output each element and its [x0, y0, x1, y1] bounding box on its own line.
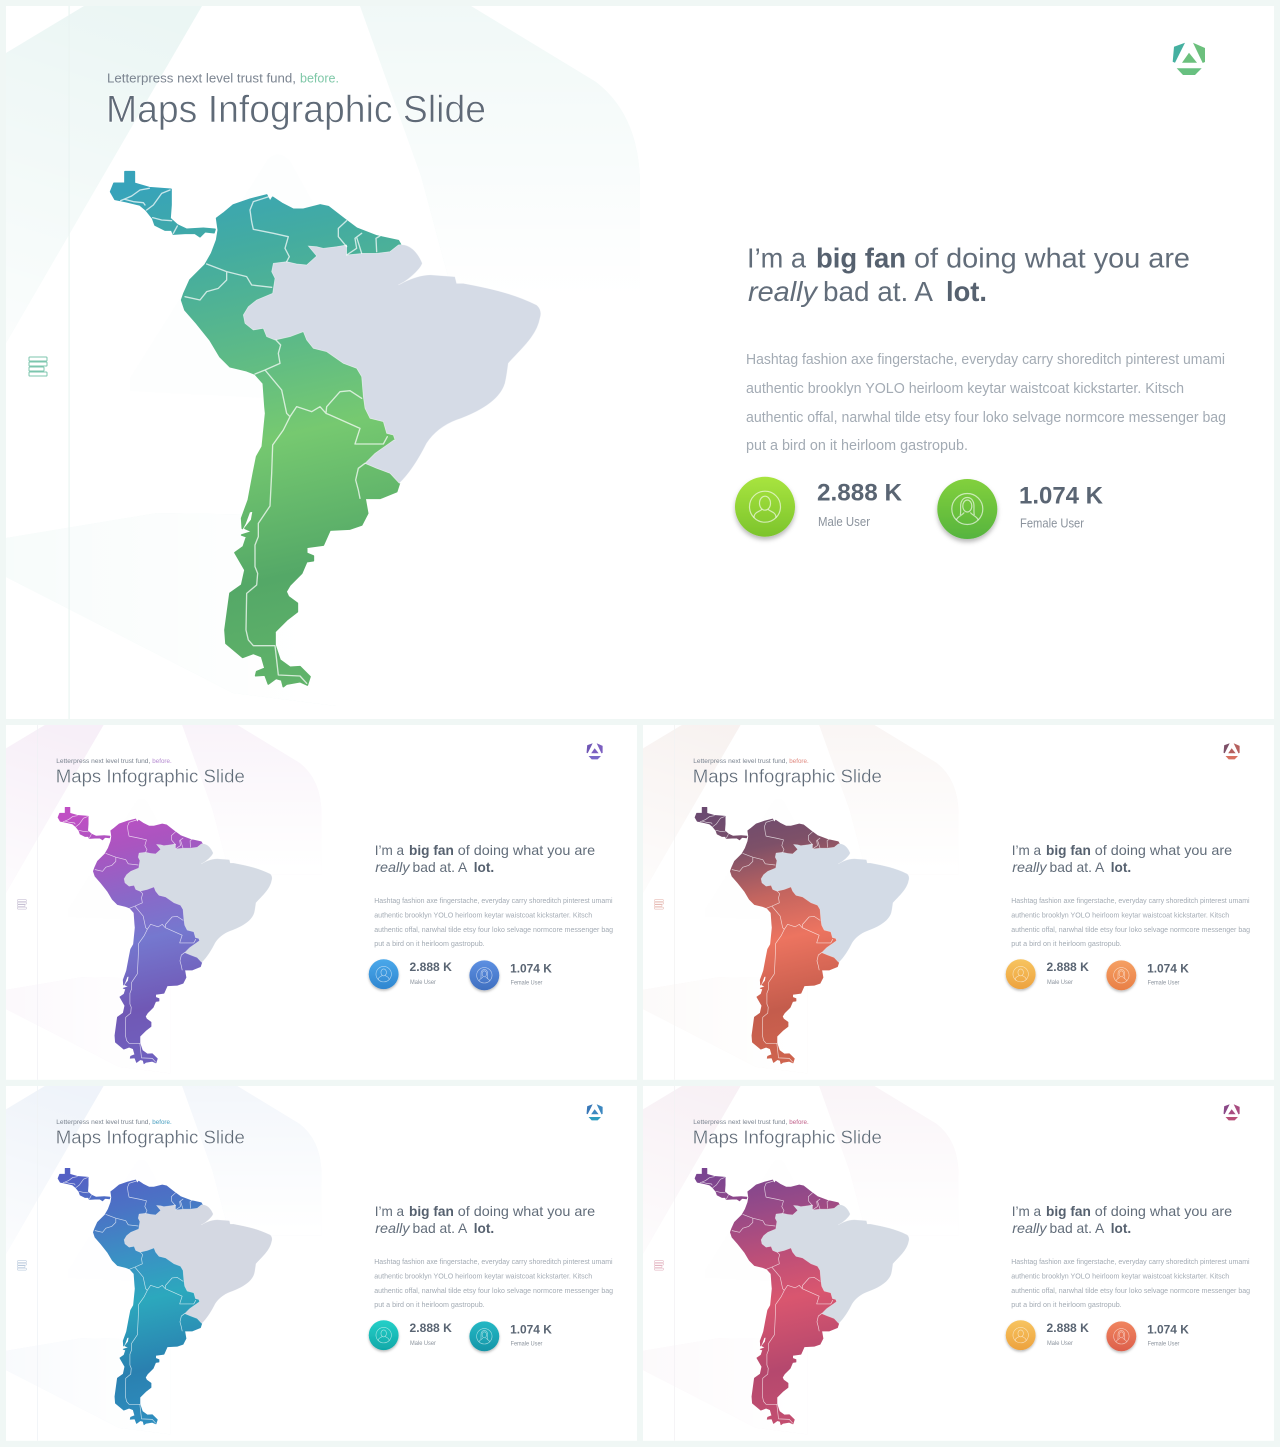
stat: male users: 2.888 K: [410, 1321, 452, 1335]
stat: female users: Female User: [1020, 517, 1084, 531]
subtitle: before.: [789, 758, 809, 765]
stat: female users: 1.074 K: [510, 961, 552, 975]
body text: put a bird on it heirloom gastropub.: [1011, 939, 1122, 948]
heading: [1012, 1203, 1232, 1236]
heading: [1012, 842, 1232, 875]
heading: bad at. A: [413, 1220, 468, 1236]
stat: female users: 1.074 K: [1147, 1322, 1189, 1336]
body text: [374, 1257, 613, 1309]
stat: male users: [369, 1320, 452, 1350]
slide background shapes: [643, 725, 1274, 1080]
stat: female users: 1.074 K: [1019, 482, 1104, 509]
subtitle: before.: [789, 1119, 809, 1126]
heading: lot.: [474, 859, 494, 875]
map: South America: [695, 807, 909, 1064]
slide background shapes: [6, 1086, 637, 1441]
stat: male users: Male User: [410, 1340, 436, 1347]
heading: big fan: [1046, 1203, 1091, 1219]
subtitle: Letterpress next level trust fund,: [107, 70, 296, 86]
map: South America: [111, 172, 541, 687]
heading: big fan: [1046, 842, 1091, 858]
stat: male users: 2.888 K: [1047, 960, 1089, 974]
subtitle: Letterpress next level trust fund,: [56, 758, 151, 765]
heading: bad at. A: [1050, 859, 1105, 875]
body text: authentic offal, narwhal tilde etsy four loko selvage normcore messenger bag: [1011, 1286, 1250, 1295]
heading: I’m a: [1012, 1203, 1041, 1219]
stat: male users: 2.888 K: [410, 960, 452, 974]
title: Maps Infographic Slide: [106, 89, 486, 131]
body text: authentic brooklyn YOLO heirloom keytar waistcoat kickstarter. Kitsch: [1011, 911, 1229, 920]
stat: male users: Male User: [1047, 1340, 1073, 1347]
icon: menu lines: [654, 900, 663, 909]
body text: Hashtag fashion axe fingerstache, everyday carry shoreditch pinterest umami: [374, 1257, 613, 1266]
heading: big fan: [816, 242, 906, 274]
heading: lot.: [946, 276, 987, 307]
body text: authentic brooklyn YOLO heirloom keytar waistcoat kickstarter. Kitsch: [1011, 1272, 1229, 1281]
body text: authentic offal, narwhal tilde etsy four loko selvage normcore messenger bag: [1011, 925, 1250, 934]
stat: female users: Female User: [511, 980, 542, 987]
body text: Hashtag fashion axe fingerstache, everyday carry shoreditch pinterest umami: [374, 896, 613, 905]
heading: lot.: [1111, 1220, 1131, 1236]
logo: [587, 1104, 603, 1120]
heading: I’m a: [375, 1203, 404, 1219]
heading: I’m a: [747, 242, 806, 274]
body text: authentic offal, narwhal tilde etsy four loko selvage normcore messenger bag: [746, 410, 1226, 426]
body text: Hashtag fashion axe fingerstache, everyday carry shoreditch pinterest umami: [746, 352, 1225, 368]
stat: male users: Male User: [410, 979, 436, 986]
heading: lot.: [474, 1220, 494, 1236]
panel: purple slide: [6, 725, 637, 1080]
heading: really: [375, 1220, 411, 1236]
body text: authentic brooklyn YOLO heirloom keytar waistcoat kickstarter. Kitsch: [374, 911, 592, 920]
stat: male users: Male User: [818, 515, 870, 529]
body text: Hashtag fashion axe fingerstache, everyday carry shoreditch pinterest umami: [1011, 896, 1250, 905]
heading: of doing what you are: [458, 1203, 595, 1219]
heading: [747, 242, 1190, 307]
stat: female users: 1.074 K: [510, 1322, 552, 1336]
heading: big fan: [409, 842, 454, 858]
body text: authentic brooklyn YOLO heirloom keytar waistcoat kickstarter. Kitsch: [746, 381, 1184, 397]
heading: really: [375, 859, 411, 875]
subtitle: Letterpress next level trust fund,: [56, 1119, 151, 1126]
logo: [1224, 1104, 1240, 1120]
body text: [1011, 896, 1250, 948]
stat: male users: [1006, 959, 1089, 989]
icon: menu lines: [654, 1261, 663, 1270]
heading: [375, 842, 595, 875]
body text: [746, 352, 1226, 454]
heading: lot.: [1111, 859, 1131, 875]
heading: of doing what you are: [458, 842, 595, 858]
heading: bad at. A: [413, 859, 468, 875]
subtitle: Letterpress next level trust fund,: [693, 1119, 788, 1126]
logo: [1173, 43, 1205, 75]
logo: [587, 743, 603, 759]
heading: really: [1012, 1220, 1048, 1236]
stat: male users: Male User: [1047, 979, 1073, 986]
stat: female users: 1.074 K: [1147, 961, 1189, 975]
panel: green main slide: [6, 6, 1274, 719]
heading: of doing what you are: [1095, 1203, 1232, 1219]
stat: male users: 2.888 K: [1047, 1321, 1089, 1335]
stat: female users: Female User: [511, 1341, 542, 1348]
stat: female users: [1106, 1321, 1189, 1351]
title: Maps Infographic Slide: [56, 767, 245, 788]
stat: female users: [1106, 960, 1189, 990]
panel: magenta slide: [643, 1086, 1274, 1441]
body text: [1011, 1257, 1250, 1309]
panel: coral slide: [643, 725, 1274, 1080]
body text: authentic offal, narwhal tilde etsy four loko selvage normcore messenger bag: [374, 925, 613, 934]
heading: big fan: [409, 1203, 454, 1219]
logo: [1224, 743, 1240, 759]
stat: male users: [1006, 1320, 1089, 1350]
icon: menu lines: [29, 357, 47, 376]
heading: really: [748, 276, 819, 307]
heading: [375, 1203, 595, 1236]
slide background shapes: [6, 725, 637, 1080]
heading: of doing what you are: [1095, 842, 1232, 858]
slide background shapes: [6, 6, 1274, 719]
subtitle: before.: [152, 1119, 172, 1126]
stat: female users: [937, 479, 1104, 539]
map: South America: [58, 807, 272, 1064]
body text: put a bird on it heirloom gastropub.: [374, 1300, 485, 1309]
stat: male users: [735, 477, 903, 537]
slide background shapes: [643, 1086, 1274, 1441]
map: South America: [58, 1168, 272, 1425]
stat: female users: Female User: [1148, 980, 1179, 987]
body text: put a bird on it heirloom gastropub.: [374, 939, 485, 948]
heading: I’m a: [1012, 842, 1041, 858]
body text: Hashtag fashion axe fingerstache, everyday carry shoreditch pinterest umami: [1011, 1257, 1250, 1266]
subtitle: Letterpress next level trust fund,: [693, 758, 788, 765]
heading: bad at. A: [823, 276, 933, 307]
title: Maps Infographic Slide: [693, 767, 882, 788]
body text: authentic brooklyn YOLO heirloom keytar waistcoat kickstarter. Kitsch: [374, 1272, 592, 1281]
subtitle: before.: [300, 70, 339, 86]
title: Maps Infographic Slide: [693, 1128, 882, 1149]
stat: female users: Female User: [1148, 1341, 1179, 1348]
heading: bad at. A: [1050, 1220, 1105, 1236]
subtitle: before.: [152, 758, 172, 765]
stat: female users: [469, 960, 552, 990]
body text: put a bird on it heirloom gastropub.: [746, 438, 968, 454]
body text: [374, 896, 613, 948]
body text: put a bird on it heirloom gastropub.: [1011, 1300, 1122, 1309]
stat: female users: [469, 1321, 552, 1351]
panel: blue slide: [6, 1086, 637, 1441]
title: Maps Infographic Slide: [56, 1128, 245, 1149]
icon: menu lines: [17, 900, 26, 909]
icon: menu lines: [17, 1261, 26, 1270]
body text: authentic offal, narwhal tilde etsy four loko selvage normcore messenger bag: [374, 1286, 613, 1295]
heading: I’m a: [375, 842, 404, 858]
stat: male users: [369, 959, 452, 989]
map: South America: [695, 1168, 909, 1425]
heading: really: [1012, 859, 1048, 875]
stat: male users: 2.888 K: [817, 480, 903, 507]
heading: of doing what you are: [914, 242, 1190, 274]
